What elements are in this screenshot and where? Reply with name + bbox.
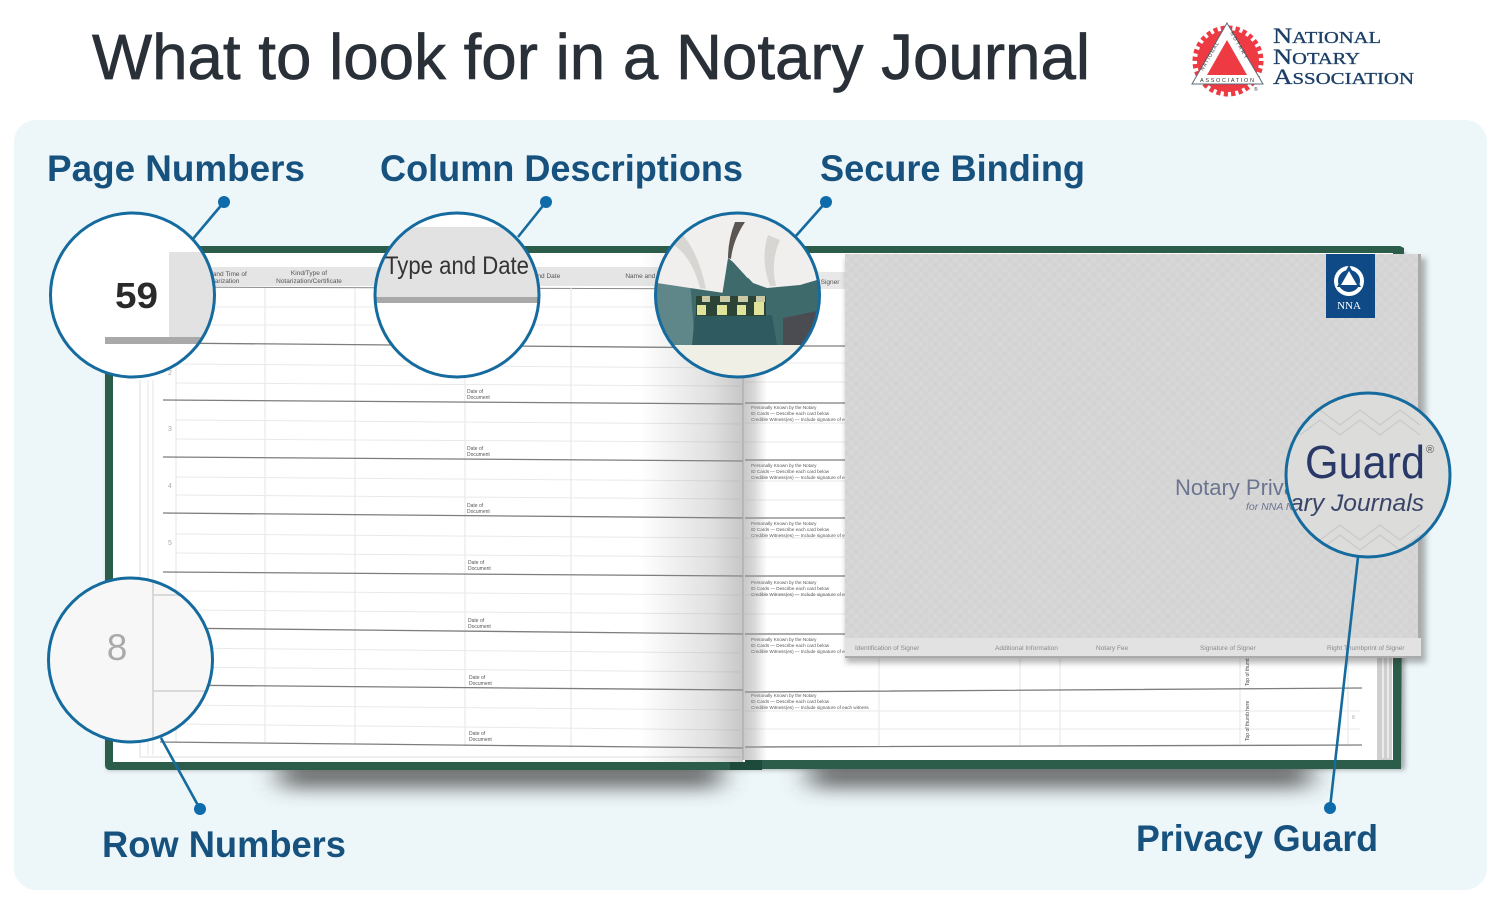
- teal spine cloth: [690, 278, 818, 345]
- left row numbers: [168, 370, 172, 547]
- identification captions: Credible Witness(es) — Include signature of each witness: [751, 649, 869, 654]
- identification captions: Credible Witness(es) — Include signature of each witness: [751, 533, 869, 538]
- magnified page number: [50, 212, 220, 378]
- identification captions: ID Cards — Describe each card below: [751, 527, 830, 532]
- identification captions: Credible Witness(es) — Include signature of each witness: [751, 592, 869, 597]
- logo wordmark: NOTARY: [1273, 44, 1360, 69]
- left sub-rules: [176, 307, 740, 730]
- date of document captions: Document: [469, 681, 492, 687]
- date of document captions: Document: [467, 395, 490, 401]
- section labels: [47, 148, 1378, 865]
- leader line: [192, 196, 230, 240]
- footer column names: Additional Information: [995, 645, 1058, 652]
- sheet subtitle: for NNA Notary Journals: [1246, 501, 1360, 513]
- identification captions: Personally Known by the Notary: [751, 637, 817, 642]
- paper folds: [728, 222, 745, 259]
- left column headers: [197, 270, 681, 285]
- footer column names: Notary Fee: [1096, 645, 1129, 652]
- logo seal: NATIONAL: [1200, 41, 1221, 72]
- footer column names: Identification of Signer: [855, 645, 920, 652]
- identification captions: Credible Witness(es) — Include signature of each witness: [751, 475, 869, 480]
- callout: row numbers: [47, 577, 215, 815]
- lens ring: [1286, 393, 1450, 557]
- spine notch: [730, 760, 762, 770]
- callout: column descriptions: [374, 196, 552, 378]
- left column headers: Notarization: [205, 278, 240, 285]
- footer column names: Right Thumbprint of Signer: [1327, 645, 1405, 652]
- date of document captions: Date of: [467, 446, 484, 452]
- thumbprint captions: [1245, 657, 1355, 741]
- lens ring: [375, 213, 539, 377]
- leader line: [518, 196, 552, 237]
- label: Page Numbers: Page Numbers: [47, 148, 305, 189]
- thumbprint captions: Top of thumb here: [1245, 700, 1251, 741]
- identification captions: Personally Known by the Notary: [751, 405, 817, 410]
- right row lines: [745, 346, 1362, 747]
- identification captions: ID Cards — Describe each card below: [751, 411, 830, 416]
- label: Privacy Guard: Privacy Guard: [1136, 818, 1378, 859]
- label: Column Descriptions: Column Descriptions: [380, 148, 743, 189]
- stitching: [696, 296, 766, 316]
- NNA badge: [1326, 254, 1375, 318]
- leader line: [1324, 557, 1358, 814]
- green cover: [105, 246, 1404, 770]
- date of document captions: Document: [468, 566, 491, 572]
- magnified row number: 8: [107, 627, 127, 668]
- label: Secure Binding: Secure Binding: [820, 148, 1085, 189]
- lens ring: [50, 213, 214, 377]
- date of document captions: Document: [467, 509, 490, 515]
- left row numbers: 4: [168, 483, 172, 490]
- date of document captions: Document: [468, 624, 491, 630]
- thumbprint captions: 8: [1352, 715, 1355, 721]
- date of document captions: Document: [469, 737, 492, 743]
- sheet: [845, 254, 1421, 658]
- callout: page numbers: [50, 196, 230, 378]
- right sub-rules: [745, 363, 1360, 729]
- identification captions: Personally Known by the Notary: [751, 693, 817, 698]
- sheet shadow: [846, 258, 1426, 663]
- logo wordmark: ASSOCIATION: [1273, 64, 1414, 89]
- left page: [113, 253, 745, 762]
- date of document captions: Date of: [468, 560, 485, 566]
- magnified column header: Type and Date: [385, 252, 529, 280]
- left column header band: [168, 267, 743, 286]
- identification captions: ID Cards — Describe each card below: [751, 699, 830, 704]
- open notary journal: [105, 246, 1405, 788]
- magnified row number: [47, 577, 215, 743]
- left column headers: Name and Address: [625, 273, 681, 280]
- identification captions: Credible Witness(es) — Include signature of each witness: [751, 417, 869, 422]
- label: Row Numbers: Row Numbers: [102, 824, 346, 865]
- identification captions: ID Cards — Describe each card below: [751, 586, 830, 591]
- identification captions: Personally Known by the Notary: [751, 580, 817, 585]
- right page: [743, 253, 1393, 760]
- footer column names: [855, 645, 1405, 652]
- logo seal: [1192, 23, 1263, 94]
- callout: secure binding: [654, 196, 832, 380]
- magnified privacy guard title: ®: [1426, 444, 1434, 456]
- teal wedge: [722, 258, 748, 293]
- title: What to look for in a Notary Journal: [92, 21, 1090, 93]
- left column headers: Kind/Type of: [291, 270, 327, 277]
- identification captions: Personally Known by the Notary: [751, 521, 817, 526]
- left row lines: [160, 343, 743, 748]
- date of document captions: Date of: [467, 389, 484, 395]
- NNA badge: NNA: [1337, 300, 1361, 312]
- magnified privacy guard title: [1284, 392, 1452, 558]
- sheet title: Notary Privacy Guard: [1175, 475, 1385, 500]
- magnified stitched spine: [654, 212, 822, 380]
- logo seal: ASSOCIATION: [1200, 78, 1254, 84]
- left column headers: Date and Time of: [197, 271, 247, 278]
- book shadow: [107, 252, 1405, 788]
- right gutter shading: [743, 253, 767, 760]
- logo: National Notary Association: [1192, 23, 1414, 94]
- page stack edge: [1377, 255, 1392, 760]
- date of document captions: Date of: [469, 675, 486, 681]
- magnified page number: 59: [115, 275, 158, 316]
- identification captions: ID Cards — Describe each card below: [751, 469, 830, 474]
- magnified privacy guard title: ary Journals: [1290, 490, 1424, 517]
- leader line: [161, 738, 206, 815]
- logo seal: NOTARY: [1228, 31, 1249, 61]
- identification captions: Personally Known by the Notary: [751, 463, 817, 468]
- sheet footer strip: [845, 638, 1421, 658]
- leader line: [795, 196, 832, 237]
- left row numbers: 2: [168, 370, 172, 377]
- privacy guard cover sheet: [845, 254, 1426, 663]
- magnified privacy guard title: Guard: [1305, 436, 1425, 488]
- lens ring: [656, 213, 820, 377]
- footer column names: Signature of Signer: [1200, 645, 1256, 652]
- dark spine shadow: [783, 311, 816, 345]
- identification captions: [751, 405, 869, 710]
- left row numbers: 5: [168, 540, 172, 547]
- lens ring: [48, 578, 212, 742]
- identification captions: Credible Witness(es) — Include signature of each witness: [751, 705, 869, 710]
- logo seal: ®: [1254, 86, 1258, 93]
- date of document captions: Date of: [467, 503, 484, 509]
- identification captions: ID Cards — Describe each card below: [751, 643, 830, 648]
- logo wordmark: NATIONAL: [1273, 23, 1381, 48]
- logo wordmark: [1273, 23, 1414, 89]
- date of document captions: Document: [467, 452, 490, 458]
- left column headers: Notarization/Certificate: [276, 278, 342, 285]
- paper block: [658, 278, 817, 293]
- right column header: Signer: [821, 279, 840, 286]
- left gutter shading: [640, 253, 743, 762]
- callout: privacy guard: [1284, 392, 1452, 814]
- magnified column header: [374, 212, 540, 378]
- left row numbers: 3: [168, 426, 172, 433]
- date of document captions: Date of: [469, 731, 486, 737]
- left column headers: and Date: [534, 273, 561, 280]
- date of document captions: Date of: [468, 618, 485, 624]
- right column rules: [879, 658, 1348, 746]
- left column rules: [265, 288, 571, 748]
- date of document captions: [467, 389, 492, 743]
- lower endpaper: [675, 262, 800, 376]
- thumbprint captions: Top of thumb: [1245, 657, 1251, 686]
